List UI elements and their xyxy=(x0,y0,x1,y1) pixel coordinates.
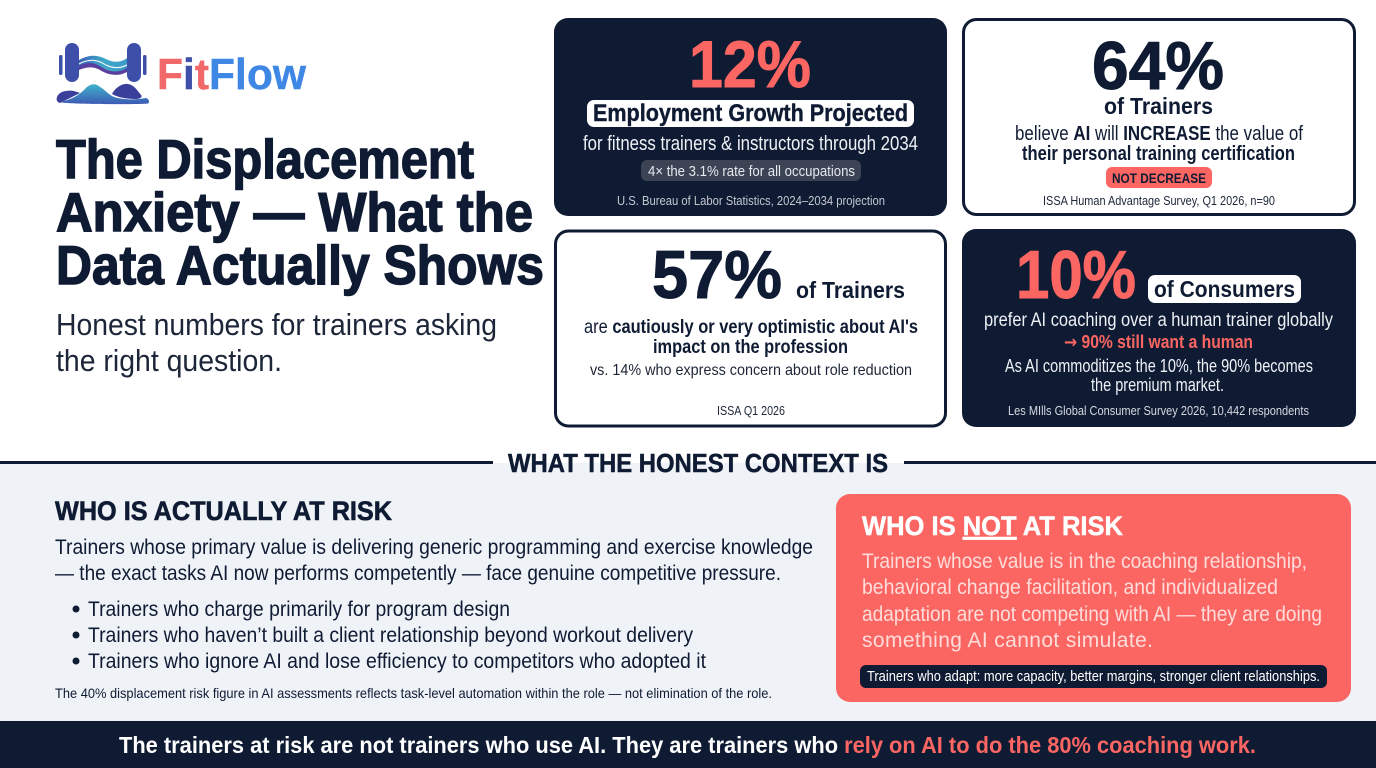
title: Data Actually Shows xyxy=(56,234,544,296)
comparison pill: 4× the 3.1% rate for all occupations xyxy=(648,163,855,180)
bullet list xyxy=(72,598,706,673)
description: for fitness trainers & instructors through 2034 xyxy=(583,133,918,155)
highlight: 90% want a human: → 90% still want a human xyxy=(1064,332,1253,353)
stat: 10%: 10% xyxy=(1016,237,1136,313)
icon: dumbbell and waves xyxy=(57,43,149,104)
panel: 64% of trainers xyxy=(964,20,1354,214)
footer banner xyxy=(0,721,1376,768)
premium market note: As AI commoditizes the 10%, the 90% becomes xyxy=(1005,356,1313,376)
title: Anxiety — What the xyxy=(56,181,533,243)
title xyxy=(56,128,544,296)
panel: who is at risk xyxy=(55,496,813,701)
label: of trainers: of Trainers xyxy=(796,277,905,303)
paragraph xyxy=(55,536,813,585)
comparison: vs. 14% who express concern about role reduction xyxy=(590,362,912,379)
description: are cautiously or very optimistic about AI's xyxy=(584,317,918,338)
pill: not decrease: NOT DECREASE xyxy=(1112,170,1206,186)
footer banner: The trainers at risk are not trainers who use AI. They are trainers who rely on AI to do the 80% coaching work. xyxy=(119,732,1256,758)
panel: 10% of consumers xyxy=(962,229,1356,427)
callout: trainers who adapt: Trainers who adapt: more capacity, better margins, stronger client relationships. xyxy=(867,669,1320,685)
description: their personal training certification xyxy=(1022,143,1295,165)
paragraph: Trainers whose value is in the coaching relationship, xyxy=(862,550,1307,573)
bullet list: Trainers who haven’t built a client relationship beyond workout delivery xyxy=(88,624,693,647)
paragraph: — the exact tasks AI now performs competently — face genuine competitive pressure. xyxy=(55,562,781,585)
premium market note: the premium market. xyxy=(1091,375,1224,395)
bullet list: Trainers who charge primarily for program design xyxy=(88,598,510,621)
paragraph xyxy=(862,550,1322,652)
description xyxy=(1015,123,1303,165)
source: ISSA Q1 2026 xyxy=(717,404,785,418)
stat: 12%: 12% xyxy=(689,27,811,101)
panel: context background xyxy=(0,463,1376,721)
footnote: The 40% displacement risk figure in AI assessments reflects task-level automation within the role — not elimination of the role. xyxy=(55,685,772,701)
panel: 57% of trainers xyxy=(556,231,946,426)
heading: WHO IS NOT AT RISK xyxy=(862,511,1123,541)
heading: WHO IS ACTUALLY AT RISK xyxy=(55,496,392,526)
paragraph: adaptation are not competing with AI — they are doing xyxy=(862,603,1322,626)
label pill: of consumers: of Consumers xyxy=(1154,276,1295,302)
subtitle: Honest numbers for trainers asking xyxy=(56,307,497,342)
description: believe AI will INCREASE the value of xyxy=(1015,123,1303,145)
subtitle xyxy=(56,307,497,378)
panel: 12% employment growth xyxy=(554,18,947,216)
source: U.S. Bureau of Labor Statistics, 2024–2034 projection xyxy=(617,194,885,208)
section heading: WHAT THE HONEST CONTEXT IS xyxy=(508,448,888,478)
description: impact on the profession xyxy=(653,337,848,358)
premium market note xyxy=(1005,356,1313,395)
paragraph: Trainers whose primary value is delivering generic programming and exercise knowledge xyxy=(55,536,813,559)
bullet list: Trainers who ignore AI and lose efficiency to competitors who adopted it xyxy=(88,650,706,673)
title: The Displacement xyxy=(56,128,474,190)
callout: trainers who adapt xyxy=(860,665,1327,688)
panel: who is not at risk xyxy=(836,494,1351,702)
paragraph: behavioral change facilitation, and individualized xyxy=(862,576,1278,599)
stat: 64%: 64% xyxy=(1092,28,1224,104)
source: ISSA Human Advantage Survey, Q1 2026, n=90 xyxy=(1043,194,1275,208)
stat: 57%: 57% xyxy=(652,237,782,313)
label: of trainers: of Trainers xyxy=(1104,93,1213,119)
logo: FitFlow xyxy=(57,43,307,104)
pill: not decrease xyxy=(1106,167,1212,188)
source: Les MIlls Global Consumer Survey 2026, 10,442 respondents xyxy=(1008,403,1309,418)
label pill: employment growth projected: Employment Growth Projected xyxy=(593,100,908,127)
description: prefer AI coaching over a human trainer globally xyxy=(984,310,1333,331)
paragraph: something AI cannot simulate. xyxy=(862,629,1153,652)
description xyxy=(584,317,918,358)
subtitle: the right question. xyxy=(56,343,282,378)
wordmark: FitFlow: FitFlow xyxy=(157,50,307,99)
